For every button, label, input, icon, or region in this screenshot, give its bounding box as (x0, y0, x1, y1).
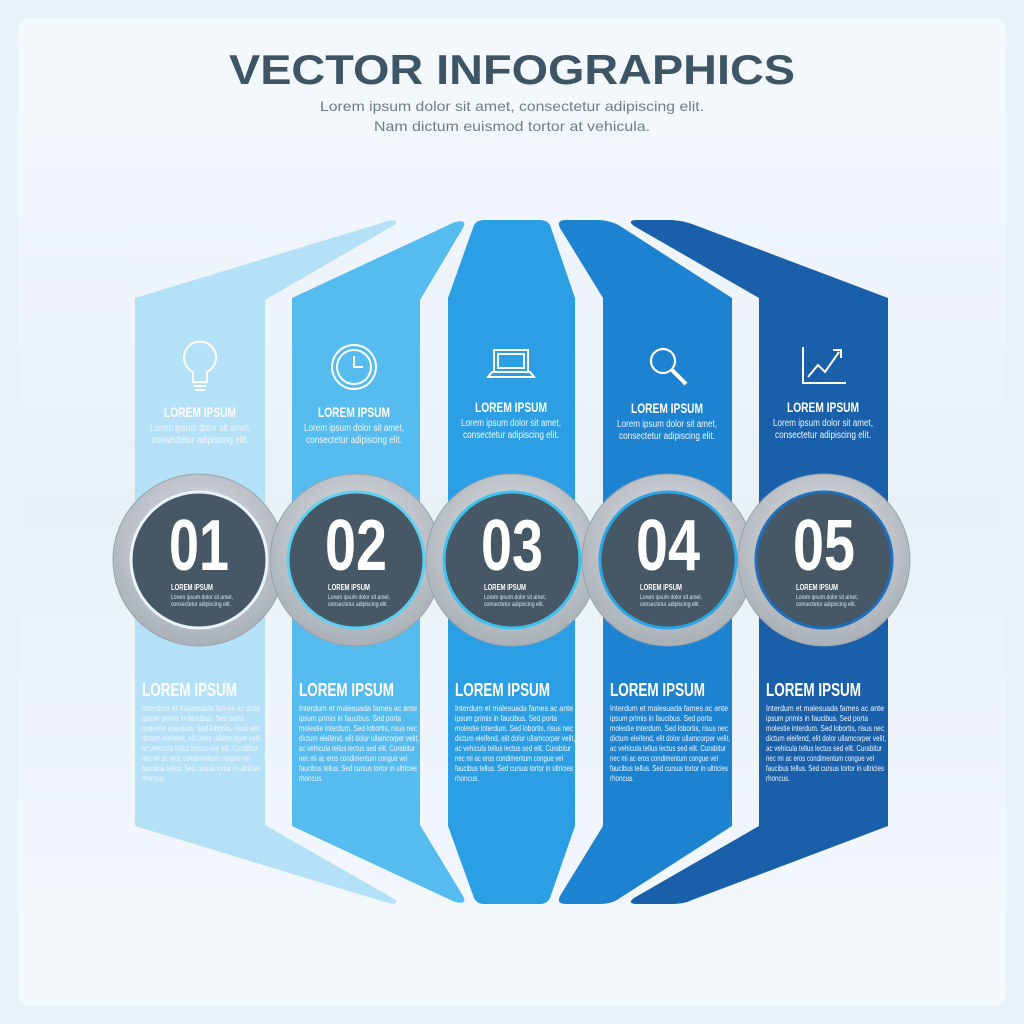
panel: column 1: Lorem ipsum dolor sit amet, (150, 423, 250, 434)
panel: column 3: consectetur adipiscing elit. (463, 430, 559, 441)
icon: magnifier (651, 349, 686, 384)
panel: column 4: Lorem ipsum dolor sit amet, (617, 419, 717, 430)
panel: column 2: LOREM IPSUM (299, 680, 394, 700)
circle 04: Lorem ipsum dolor sit amet, (640, 595, 702, 601)
circle 02 (270, 474, 442, 646)
circle 01: Lorem ipsum dolor sit amet, (171, 595, 233, 601)
circle 01 (113, 474, 285, 646)
panel: column 5: LOREM IPSUM (766, 680, 861, 700)
subtitle: Lorem ipsum dolor sit amet, consectetur adipiscing elit. (320, 98, 704, 114)
subtitle: Nam dictum euismod tortor at vehicula. (374, 118, 650, 134)
panel: column 1 (135, 220, 396, 904)
circle 03: Lorem ipsum dolor sit amet, (484, 595, 546, 601)
panel: column 5: Lorem ipsum dolor sit amet, (773, 418, 873, 429)
panel: column 2 (292, 221, 464, 903)
icon: laptop (488, 350, 534, 377)
circle 04: LOREM IPSUM (640, 583, 682, 592)
circle 01: consectetur adipiscing elit. (171, 602, 231, 608)
panel: column 2: LOREM IPSUM (318, 404, 390, 420)
circle 04: consectetur adipiscing elit. (640, 602, 700, 608)
heading 1: LOREM IPSUM (164, 404, 236, 420)
panel: column 5 (631, 220, 888, 904)
panel: column 2: Lorem ipsum dolor sit amet, (304, 423, 404, 434)
circle 04 (582, 474, 754, 646)
circle 03 (426, 474, 598, 646)
panel: column 1: consectetur adipiscing elit. (152, 435, 248, 446)
panel: column 5: consectetur adipiscing elit. (775, 430, 871, 441)
circle 05 (738, 474, 910, 646)
circle 03: consectetur adipiscing elit. (484, 602, 544, 608)
circle 02: Lorem ipsum dolor sit amet, (328, 595, 390, 601)
subtitle (320, 98, 704, 134)
icon: light bulb (184, 342, 216, 390)
panel: column 4: consectetur adipiscing elit. (619, 431, 715, 442)
panel: column 4 (559, 220, 732, 904)
circle 05: Lorem ipsum dolor sit amet, (796, 595, 858, 601)
body 1: LOREM IPSUM (142, 680, 237, 700)
panel: column 4: LOREM IPSUM (610, 680, 705, 700)
circle 02: LOREM IPSUM (328, 583, 370, 592)
circle 01: 01 (169, 506, 229, 586)
panel: column 3: LOREM IPSUM (475, 399, 547, 415)
panel: column 4: LOREM IPSUM (631, 400, 703, 416)
circle 05: consectetur adipiscing elit. (796, 602, 856, 608)
icon: chart (803, 347, 846, 383)
circle 03: LOREM IPSUM (484, 583, 526, 592)
icon: clock (332, 345, 376, 389)
panel: column 3 (448, 220, 575, 904)
circle 05: LOREM IPSUM (796, 583, 838, 592)
circle 03: 03 (481, 506, 543, 586)
circle 04: 04 (636, 506, 700, 586)
circle 02: consectetur adipiscing elit. (328, 602, 388, 608)
circle 05: 05 (793, 506, 855, 586)
panel: column 2: consectetur adipiscing elit. (306, 435, 402, 446)
circle 02: 02 (325, 506, 387, 586)
panel: column 5: LOREM IPSUM (787, 399, 859, 415)
title: VECTOR INFOGRAPHICS (229, 46, 795, 93)
circle 01: LOREM IPSUM (171, 583, 213, 592)
panel: column 3: Lorem ipsum dolor sit amet, (461, 418, 561, 429)
panel: column 3: LOREM IPSUM (455, 680, 550, 700)
